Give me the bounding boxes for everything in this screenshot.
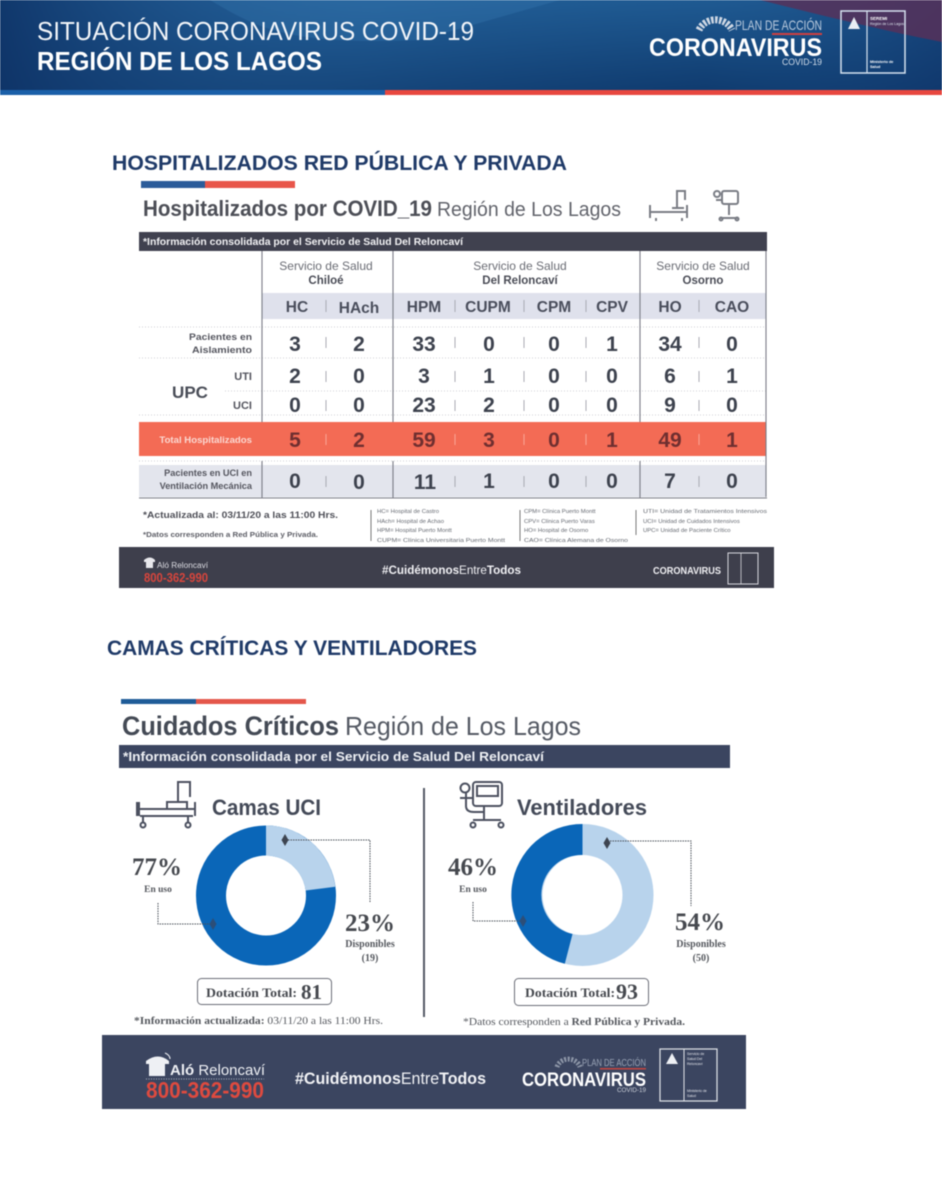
- callout: 54% disponibles: (50): [693, 953, 709, 964]
- column headers: CPM: [537, 299, 571, 316]
- header title: REGIÓN DE LOS LAGOS: [37, 46, 322, 76]
- dotación total: 93: [514, 978, 648, 1006]
- legend: abbreviations: [371, 509, 767, 544]
- update notes: *Datos corresponden a Red Pública y Privada.: [143, 530, 318, 539]
- row: ventilación mecánica: Ventilación Mecánica: [160, 481, 253, 491]
- callout: 54% disponibles: [604, 837, 726, 964]
- footer band: table: CORONAVIRUS: [653, 566, 721, 577]
- footer band: table: 800-362-990: [144, 571, 208, 585]
- row: pacientes en aislamiento: 0: [483, 333, 495, 356]
- legend: abbreviations: CPM= Clínica Puerto Montt: [524, 509, 596, 515]
- logo: seremi de salud: Región de Los Lagos: [870, 22, 904, 26]
- header title: [37, 16, 474, 76]
- icon: phone small: [144, 558, 155, 568]
- footer band: cuidados críticos: [102, 1035, 746, 1109]
- row: pacientes en aislamiento: Aislamiento: [192, 345, 252, 355]
- callout: 54% disponibles: 54%: [675, 909, 725, 936]
- dotación total: 93: Dotación Total:: [525, 985, 615, 1000]
- callout: 46% en uso: [448, 854, 526, 927]
- row: ventilación mecánica: 0: [548, 470, 560, 493]
- info bar: [139, 232, 767, 251]
- column headers: HPM: [407, 299, 441, 316]
- row: upc uci: 0: [353, 394, 365, 417]
- row: total hospitalizados: Total Hospitalizados: [159, 435, 252, 446]
- service headers: Del Reloncaví: [482, 275, 559, 287]
- dotación total: 81: 81: [301, 980, 322, 1004]
- row: upc uci: 23: [412, 394, 436, 417]
- legend: abbreviations: UCI= Unidad de Cuidados Intensivos: [643, 519, 740, 525]
- callout: 54% disponibles: Disponibles: [676, 939, 726, 950]
- legend: abbreviations: CUPM= Clínica Universitaria Puerto Montt: [377, 538, 505, 544]
- column headers: CPV: [596, 299, 629, 316]
- legend: abbreviations: UPC= Unidad de Paciente Crítico: [643, 528, 731, 534]
- logo: seremi de salud: [841, 11, 905, 73]
- total row background: [139, 422, 766, 456]
- panel title: Cuidados Críticos: [122, 711, 339, 741]
- row: pacientes en aislamiento: 34: [658, 333, 682, 356]
- callout: 23% disponibles: 23%: [345, 910, 395, 937]
- dotación total: 81: [198, 978, 332, 1004]
- panel title: Hospitalizados por COVID_19: [143, 196, 432, 221]
- row: total hospitalizados: [159, 429, 738, 452]
- logo: plan de acción coronavirus: CORONAVIRUS: [649, 34, 822, 62]
- heading: ventiladores: Ventiladores: [517, 795, 647, 820]
- legend: abbreviations: HC= Hospital de Castro: [377, 509, 440, 515]
- helpline: Aló Reloncaví: [170, 1062, 266, 1079]
- callout: 23% disponibles: [282, 834, 395, 964]
- dotación total: 93: 93: [616, 979, 638, 1004]
- row: upc uti: 2: [289, 365, 301, 388]
- row label: upc: UPC: [172, 383, 208, 402]
- icon: ventilator: [460, 782, 504, 828]
- helpline: 800-362-990: [146, 1077, 264, 1103]
- logo: servicio de salud: Reloncaví: [687, 1062, 703, 1066]
- callout: 23% disponibles: Disponibles: [345, 939, 395, 950]
- service headers: Servicio de Salud: [656, 259, 750, 273]
- logo: plan de acción coronavirus: PLAN DE ACCIÓN: [735, 17, 822, 33]
- column headers: HO: [658, 299, 682, 316]
- logo: servicio de salud: [660, 1049, 717, 1101]
- service headers: Servicio de Salud: [279, 259, 373, 273]
- row: upc uci: [233, 394, 738, 417]
- legend: abbreviations: HPM= Hospital Puerto Montt: [377, 528, 452, 534]
- row: ventilación mecánica: Pacientes en UCI en: [164, 468, 252, 478]
- logo: plan de acción coronavirus: [649, 17, 822, 67]
- row: upc uti: [234, 365, 738, 388]
- row: ventilación mecánica: 0: [726, 470, 738, 493]
- logo: seremi de salud: SEREMI: [870, 16, 887, 21]
- panel title: [122, 711, 581, 741]
- callout: 77% en uso: En uso: [144, 885, 172, 895]
- row: pacientes en aislamiento: 0: [726, 333, 738, 356]
- logo: plan de acción coronavirus: CORONAVIRUS: [522, 1070, 646, 1091]
- legend: abbreviations: UTI= Unidad de Tratamientos Intensivos: [643, 509, 767, 515]
- service headers: Servicio de Salud: [473, 259, 567, 273]
- logo: servicio de salud: Servicio de: [687, 1052, 704, 1056]
- callout: 46% en uso: 46%: [448, 854, 498, 881]
- icon: telephone: [146, 1053, 170, 1076]
- callout: 23% disponibles: (19): [362, 953, 378, 964]
- column headers: HC: [286, 299, 308, 316]
- footer band: table: [119, 547, 774, 588]
- column headers: HAch: [339, 300, 379, 317]
- dotación total: 81: Dotación Total:: [206, 985, 297, 1000]
- panel title: Región de Los Lagos: [437, 199, 621, 221]
- legend: abbreviations: CAO= Clínica Alemana de Osorno: [524, 538, 629, 544]
- row: upc uci: 0: [726, 394, 738, 417]
- row: upc uci: UCI: [233, 400, 252, 412]
- update notes: *Actualizada al: 03/11/20 a las 11:00 Hrs.: [143, 509, 338, 520]
- row: upc uci: 2: [483, 394, 495, 417]
- info bar: *Información consolidada por el Servicio de Salud Del Reloncaví: [143, 237, 463, 248]
- row: total hospitalizados: 1: [726, 429, 738, 452]
- logo: servicio de salud: Ministerio de: [687, 1089, 707, 1093]
- row: total hospitalizados: 59: [412, 429, 436, 452]
- row: total hospitalizados: 49: [658, 429, 682, 452]
- row: upc uti: UTI: [234, 371, 252, 383]
- row: ventilación mecánica: 0: [606, 470, 618, 493]
- row: upc uti: 0: [353, 365, 365, 388]
- row: pacientes en aislamiento: 1: [606, 333, 618, 356]
- service headers: Chiloé: [308, 275, 344, 287]
- row: total hospitalizados: 0: [548, 429, 560, 452]
- header title: SITUACIÓN CORONAVIRUS COVID-19: [37, 16, 474, 46]
- row: ventilación mecánica: 0: [353, 471, 365, 494]
- row: upc uti: 3: [418, 365, 430, 388]
- logo: plan de acción coronavirus: PLAN DE ACCIÓN: [582, 1056, 646, 1069]
- row: total hospitalizados: 5: [289, 429, 301, 452]
- row: ventilación mecánica: 7: [664, 470, 676, 493]
- panel: cuidados críticos: [102, 699, 746, 1109]
- row: upc uci: 0: [289, 394, 301, 417]
- callout: 77% en uso: [132, 854, 216, 930]
- row: upc uti: 0: [606, 365, 618, 388]
- column headers: CAO: [715, 299, 749, 316]
- panel title: [143, 196, 621, 221]
- heading: camas críticas: CAMAS CRÍTICAS Y VENTILADORES: [107, 637, 477, 660]
- service headers: [262, 259, 766, 319]
- row: pacientes en aislamiento: 33: [412, 333, 436, 356]
- row: upc uti: 1: [726, 365, 738, 388]
- icon: ventilator small: [714, 191, 738, 220]
- logo: seremi de salud: Ministerio de: [870, 60, 893, 64]
- accent bar: [121, 699, 306, 704]
- row: pacientes en aislamiento: 2: [353, 333, 365, 356]
- footer band: table: #CuidémonosEntreTodos: [382, 563, 521, 577]
- row: upc uci: 0: [548, 394, 560, 417]
- legend: abbreviations: HO= Hospital de Osorno: [524, 528, 589, 534]
- helpline: [146, 1062, 266, 1103]
- donut chart: ventiladores: [511, 824, 638, 964]
- row: upc uci: 0: [606, 394, 618, 417]
- logo: servicio de salud: Salud Del: [687, 1057, 702, 1061]
- footer band: table: Aló Reloncaví: [157, 561, 209, 570]
- info bar: [119, 745, 730, 768]
- row: total hospitalizados: 3: [483, 429, 495, 452]
- update notes: [143, 509, 338, 539]
- accent bar: [141, 181, 295, 188]
- note: información actualizada: *Información actualizada: 03/11/20 a las 11:00 Hrs.: [134, 1016, 383, 1027]
- legend: abbreviations: HAch= Hospital de Achao: [377, 519, 445, 525]
- row: ventilación mecánica: 11: [414, 471, 436, 494]
- logo: seremi de salud: Salud: [870, 65, 881, 69]
- row: pacientes en aislamiento: 0: [548, 333, 560, 356]
- heading: camas uci: Camas UCI: [212, 795, 321, 820]
- icon: hospital bed: [137, 782, 195, 828]
- row: total hospitalizados: 1: [606, 429, 618, 452]
- donut chart: camas uci: [211, 826, 335, 950]
- row: pacientes en aislamiento: Pacientes en: [189, 332, 252, 342]
- row: upc uti: 1: [483, 365, 495, 388]
- hashtag: #CuidémonosEntreTodos: [295, 1069, 486, 1088]
- callout: 46% en uso: En uso: [459, 885, 487, 895]
- panel title: Región de Los Lagos: [345, 711, 581, 741]
- header banner: [0, 0, 942, 95]
- row: pacientes en aislamiento: 3: [289, 333, 301, 356]
- service headers: Osorno: [683, 275, 723, 287]
- note: datos: *Datos corresponden a Red Pública y Privada.: [463, 1017, 685, 1028]
- panel: hospitalizados table: [119, 181, 774, 588]
- legend: abbreviations: CPV= Clínica Puerto Varas: [524, 519, 595, 525]
- row: ventilación mecánica: [160, 468, 738, 494]
- column headers: [286, 299, 749, 317]
- row: total hospitalizados: 2: [353, 429, 365, 452]
- row: ventilación mecánica: 0: [289, 470, 301, 493]
- callout: 77% en uso: 77%: [132, 854, 182, 881]
- logo: plan de acción coronavirus: COVID-19: [617, 1088, 647, 1094]
- row: upc uti: 0: [548, 365, 560, 388]
- ventilation row background: [139, 465, 766, 497]
- column headers: CUPM: [465, 299, 511, 316]
- row: upc uci: 9: [664, 394, 676, 417]
- logo: plan de acción coronavirus: [522, 1056, 647, 1094]
- icon: bed small: [650, 191, 687, 221]
- row: ventilación mecánica: 1: [483, 470, 495, 493]
- row: upc uti: 6: [664, 365, 676, 388]
- info bar: *Información consolidada por el Servicio de Salud Del Reloncaví: [123, 749, 544, 764]
- heading: hospitalizados: HOSPITALIZADOS RED PÚBLICA Y PRIVADA: [112, 151, 567, 175]
- row: pacientes en aislamiento: [189, 332, 738, 356]
- logo: servicio de salud: Salud: [687, 1094, 696, 1098]
- logo: plan de acción coronavirus: COVID-19: [782, 57, 822, 67]
- divider: [423, 788, 425, 1017]
